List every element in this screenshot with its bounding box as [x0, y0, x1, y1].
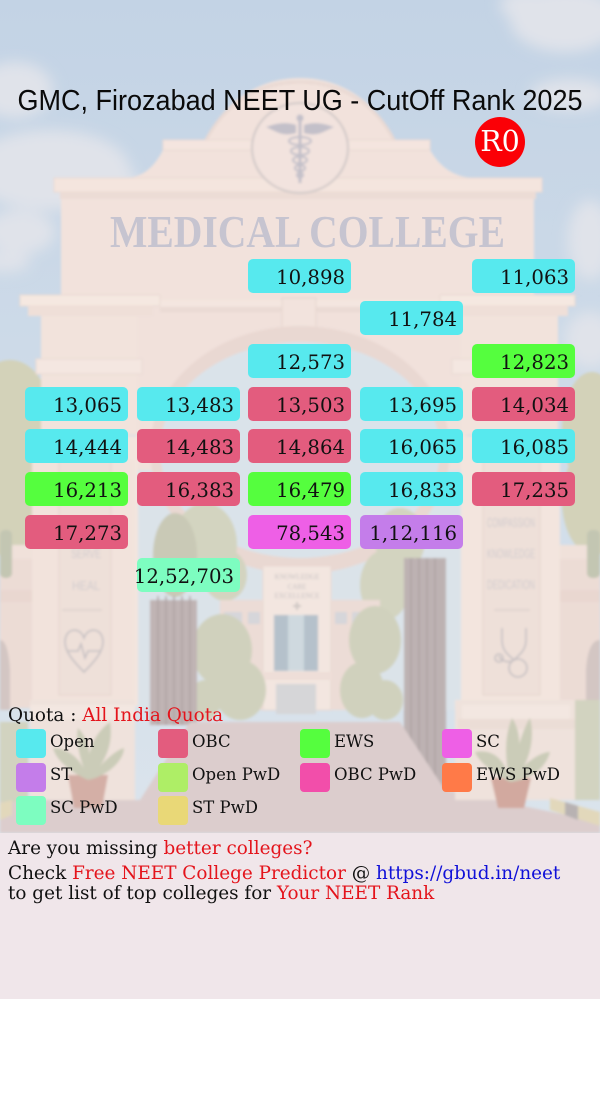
- cutoff rank grid: 17,235: [500, 479, 569, 502]
- cutoff rank grid: 14,483: [165, 436, 234, 459]
- cutoff rank grid: 16,085: [500, 436, 569, 459]
- view through arch: [134, 470, 464, 710]
- central building: [220, 600, 380, 710]
- cutoff rank grid: 17,273: [53, 522, 122, 545]
- cutoff rank grid: 11,784: [388, 308, 457, 331]
- iron gates: [150, 558, 446, 790]
- pier inscriptions: KNOWLEDGE: [487, 547, 535, 561]
- quota line: Quota : All India Quota: [8, 705, 223, 726]
- promo text: to get list of top colleges for Your NEET Rank: [8, 883, 434, 904]
- background illustration: medical college gate: [0, 0, 600, 833]
- pier inscriptions: SERVE: [71, 547, 101, 561]
- cutoff rank grid: 78,543: [276, 522, 345, 545]
- path: [0, 722, 600, 833]
- cutoff rank grid: 12,573: [276, 351, 345, 374]
- right pier: [440, 295, 575, 706]
- pier inscriptions: COMPASSION: [487, 516, 535, 530]
- cutoff rank grid: 12,52,703: [134, 565, 234, 588]
- legend: OBC: [192, 732, 231, 751]
- cutoff rank grid: 16,065: [388, 436, 457, 459]
- legend: SC PwD: [50, 798, 118, 817]
- promo text: Check Free NEET College Predictor @ https://gbud.in/neet: [8, 863, 560, 884]
- background trees through arch: [173, 503, 425, 620]
- lower plinths: [30, 700, 135, 800]
- cutoff rank grid: 13,483: [165, 394, 234, 417]
- cutoff rank grid: 14,444: [53, 436, 122, 459]
- cutoff rank grid: 11,063: [500, 266, 569, 289]
- left pier: [20, 295, 160, 710]
- legend: Open PwD: [192, 765, 280, 784]
- round badge: R0: [480, 125, 520, 158]
- cutoff rank grid: 13,695: [388, 394, 457, 417]
- legend: OBC PwD: [334, 765, 416, 784]
- legend: SC: [476, 732, 500, 751]
- far trees: [0, 360, 600, 562]
- background lettering: MEDICAL COLLEGE: MEDICAL COLLEGE: [110, 206, 505, 257]
- legend: Open: [50, 732, 94, 751]
- icon: stethoscope: [495, 628, 527, 677]
- cutoff rank grid: 1,12,116: [369, 522, 457, 545]
- kerb: [550, 798, 600, 826]
- legend: ST PwD: [192, 798, 258, 817]
- cutoff rank grid: 13,065: [53, 394, 122, 417]
- medallion with caduceus: [252, 103, 348, 193]
- cutoff rank grid: 16,479: [276, 479, 345, 502]
- background illustration: medical college gate: EXCELLENCE: [274, 592, 320, 600]
- legend: [16, 729, 560, 825]
- pier inscriptions: [71, 516, 535, 593]
- side walls: [0, 548, 34, 708]
- round badge: [475, 117, 525, 167]
- legend: ST: [50, 765, 72, 784]
- icon: heart with pulse: [65, 630, 103, 672]
- cutoff rank grid: 16,213: [53, 479, 122, 502]
- pier inscriptions: DEDICATION: [487, 578, 535, 592]
- background illustration: medical college gate: CARE: [288, 583, 306, 591]
- promo panel: [0, 833, 600, 999]
- gate upper body: [61, 78, 534, 345]
- cutoff rank grid: 16,833: [388, 479, 457, 502]
- entablature and arch body: [137, 300, 467, 480]
- cutoff rank grid: 14,864: [276, 436, 345, 459]
- cutoff rank grid: 10,898: [276, 266, 345, 289]
- cutoff rank grid: 13,503: [276, 394, 345, 417]
- cutoff rank grid: 14,034: [500, 394, 569, 417]
- pier inscriptions: HEAL: [72, 579, 100, 593]
- cutoff rank grid: [25, 259, 575, 592]
- cutoff rank grid: 12,823: [500, 351, 569, 374]
- background illustration: medical college gate: KNOWLEDGE: [275, 573, 319, 581]
- promo text: [8, 838, 560, 904]
- promo text: Are you missing better colleges?: [8, 838, 312, 859]
- foreground trees: [189, 606, 403, 720]
- legend: EWS PwD: [476, 765, 560, 784]
- cutoff rank grid: 16,383: [165, 479, 234, 502]
- potted plants: [53, 718, 550, 808]
- legend: EWS: [334, 732, 374, 751]
- building door: [274, 615, 318, 671]
